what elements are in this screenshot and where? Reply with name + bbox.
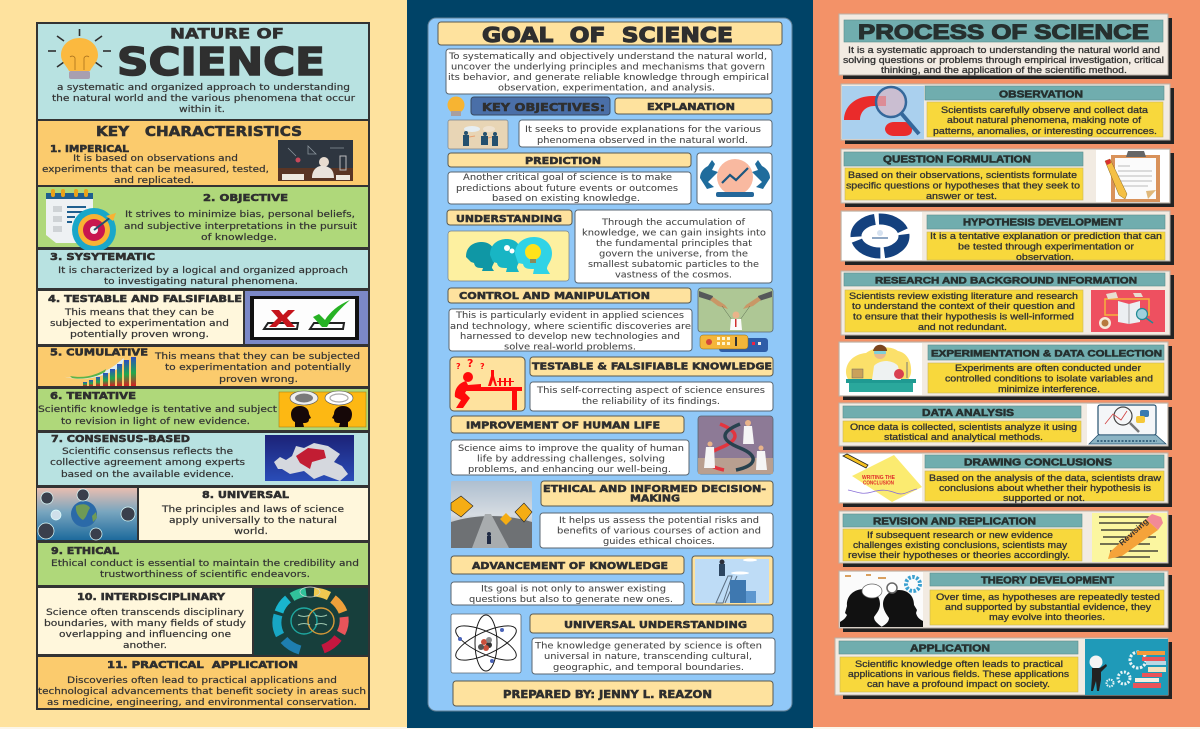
label: understanding: UNDERSTANDING <box>456 214 562 225</box>
icon: checklist and target <box>46 189 116 252</box>
text block: goal statement: uncover the underlying principles and mechanisms that govern <box>451 62 765 72</box>
text block: control and manipulation: This is particularly evident in applied sciences <box>455 311 684 321</box>
text: research: and not redundant. <box>918 322 1007 332</box>
heading: research <box>844 273 1165 286</box>
text: ethical: Ethical conduct is essential to maintain the credibility and <box>51 559 359 569</box>
text: research: Scientists review existing literature and research <box>849 291 1078 301</box>
text: experimentation: minimize interference. <box>998 384 1100 394</box>
image: scientist at chalkboard <box>278 140 353 181</box>
text: practical application: as medicine, engineering, and environmental conservation. <box>47 698 357 708</box>
text: practical application <box>38 676 366 708</box>
text: consensus <box>50 447 245 480</box>
label: prediction <box>448 153 691 167</box>
section: ethical <box>38 543 368 585</box>
text: systematic: to investigating natural phenomena. <box>104 277 298 287</box>
text block: improvement of human life <box>451 440 689 475</box>
text: consensus: collective agreement among experts <box>50 458 245 468</box>
section: cumulative <box>38 347 368 386</box>
label: key objectives <box>471 97 610 115</box>
text: practical application: Discoveries often lead to practical applications and <box>67 676 337 686</box>
section: consensus-based <box>38 433 368 485</box>
text block: goal statement <box>446 49 772 94</box>
image: open book and magnifier <box>1091 290 1165 332</box>
label: understanding <box>447 210 572 225</box>
text block: understanding: govern the universe, from the <box>599 250 748 260</box>
image: writing the conclusion <box>840 454 922 502</box>
heading: 9. ethical: 9. ETHICAL <box>51 546 120 557</box>
image: earth and network <box>37 488 137 540</box>
text: hypothesis development: be tested through experimentation or <box>958 242 1134 252</box>
card: hypothesis development <box>841 211 1174 265</box>
panel: goal of science <box>407 0 813 728</box>
text: testable: potentially proven wrong. <box>70 330 209 340</box>
text: universal: world. <box>234 527 268 537</box>
text block: testable and falsifiable knowledge <box>530 382 773 411</box>
heading: data analysis: DATA ANALYSIS <box>922 408 1014 419</box>
image: crystal ball with chart <box>697 153 772 204</box>
text: observation <box>927 102 1163 137</box>
heading: 4. testable and falsifiable: 4. TESTABLE AND FALSIFIABLE <box>48 294 242 305</box>
heading: revision and replication <box>843 514 1082 528</box>
label: explanation: EXPLANATION <box>647 102 735 113</box>
label: control and manipulation: CONTROL AND MANIPULATION <box>459 291 650 302</box>
text: observation: patterns, anomalies, or interesting occurrences. <box>933 126 1157 136</box>
text block: explanation <box>519 120 772 147</box>
text: interdisciplinary: Science often transcends disciplinary <box>46 608 244 618</box>
heading: nature of: NATURE OF <box>170 26 284 42</box>
text: revision and replication: revise their hypotheses or theories accordingly. <box>848 550 1070 560</box>
text: data analysis <box>843 421 1081 442</box>
heading: 5. cumulative: 5. CUMULATIVE <box>50 348 148 358</box>
icon: remote controls <box>700 335 768 352</box>
text: systematic <box>58 266 348 287</box>
text: tentative <box>38 405 278 427</box>
text: application <box>840 657 1078 692</box>
heading: revision and replication: REVISION AND REPLICATION <box>873 516 1036 528</box>
text: process definition: solving questions or problems through empirical investigation, critical <box>843 55 1164 65</box>
image: puzzle pieces <box>265 435 354 481</box>
text: drawing conclusions <box>925 471 1164 503</box>
text: process definition <box>843 45 1164 75</box>
text: interdisciplinary: overlapping and influencing one <box>59 630 231 640</box>
icon: confused figure at lab table: ? <box>467 357 473 370</box>
image: revising pencil: Revising <box>1117 517 1150 547</box>
text block: universal understanding <box>532 638 775 674</box>
text: universal <box>161 505 344 537</box>
text block: ethical decision-making <box>540 513 773 548</box>
icon: small bulb <box>448 96 464 116</box>
heading: key characteristics: KEY CHARACTERISTICS <box>96 124 302 140</box>
text: objective: It strives to minimize bias, personal beliefs, <box>125 210 355 220</box>
text: consensus: Scientific consensus reflects the <box>62 447 233 457</box>
text block: understanding: knowledge, we can gain insights into <box>582 228 766 238</box>
label: key objectives: KEY OBJECTIVES: <box>482 101 605 114</box>
label: prediction: PREDICTION <box>525 156 601 167</box>
section: testable and falsifiable <box>38 291 368 344</box>
text: experimentation: controlled conditions to isolate variables and <box>945 374 1153 384</box>
text: ethical <box>51 559 359 580</box>
text: data analysis: statistical and analytical methods. <box>884 432 1043 442</box>
text: testable <box>50 308 229 340</box>
text: revision and replication: If subsequent research or new evidence <box>867 530 1053 540</box>
image: heads with gears <box>840 572 923 627</box>
text block: universal understanding: universal in nature, transcending cultural, <box>544 652 752 662</box>
text: observation: about natural phenomena, making note of <box>947 115 1141 125</box>
heading: 6. tentative: 6. TENTATIVE <box>50 391 136 402</box>
section: systematic <box>38 250 368 288</box>
text: drawing conclusions: supported or not. <box>1003 493 1085 503</box>
text: hypothesis development: observation. <box>1016 252 1074 262</box>
text block: universal understanding: The knowledge generated by science is often <box>534 642 762 652</box>
text block: ethical decision-making: It helps us assess the potential risks and <box>559 516 759 526</box>
image: puppet hands <box>698 288 773 332</box>
image: road with signs <box>451 481 532 548</box>
text block: control and manipulation: and technology, where scientific discoveries are <box>450 322 691 332</box>
text: systematic: It is characterized by a logical and organized approach <box>58 266 348 276</box>
label: universal understanding: UNIVERSAL UNDERSTANDING <box>564 620 747 631</box>
heading: observation <box>925 86 1164 100</box>
text: revision and replication: challenges existing conclusions, scientists may <box>853 540 1067 550</box>
text: drawing conclusions: Based on the analysis of the data, scientists draw <box>929 473 1161 483</box>
text: cumulative: This means that they can be subjected <box>154 352 360 362</box>
text block: advancement of knowledge <box>451 582 684 605</box>
text: imperical <box>42 154 269 186</box>
text: definition <box>52 83 355 115</box>
text block: prediction <box>448 172 691 204</box>
card: revision and replication <box>839 511 1172 567</box>
heading: application: APPLICATION <box>910 644 990 654</box>
text block: control and manipulation: solve real-world problems. <box>504 342 636 352</box>
card: data analysis <box>839 403 1172 450</box>
text: observation: Scientists carefully observe and collect data <box>941 105 1149 115</box>
text block: control and manipulation: harnessed to develop new technologies and <box>460 332 680 342</box>
text: tentative: to revision in light of new evidence. <box>61 417 250 427</box>
text: question formulation: specific questions or hypotheses that they seek to <box>846 180 1080 190</box>
heading: hypothesis development <box>927 215 1165 229</box>
label: testable and falsifiable knowledge <box>530 357 773 376</box>
label: improvement of human life <box>451 416 684 433</box>
label: universal understanding <box>530 614 773 633</box>
card: application <box>835 638 1172 699</box>
image: brain ring on chalkboard <box>254 587 368 655</box>
heading: process of science: PROCESS OF SCIENCE <box>858 21 1149 44</box>
credit: prepared by <box>453 681 773 706</box>
image: person, gears and books <box>1085 639 1168 695</box>
image: heads with ideas <box>448 231 569 281</box>
text: drawing conclusions: conclusions about whether their hypothesis is <box>939 483 1151 493</box>
section: interdisciplinary <box>38 587 368 655</box>
text: question formulation <box>845 168 1083 201</box>
heading: 11. practical application: 11. PRACTICAL APPLICATION <box>107 660 298 671</box>
text: theory development: Over time, as hypotheses are repeatedly tested <box>936 592 1160 602</box>
image: laptop with python logo <box>1087 404 1167 445</box>
text block: understanding: the fundamental principles that <box>596 239 753 249</box>
heading: hypothesis development: HYPOTHESIS DEVELOPMENT <box>963 218 1123 228</box>
text block: testable and falsifiable knowledge: the reliability of its findings. <box>582 397 720 407</box>
text: cumulative: proven wrong. <box>219 375 298 385</box>
card: research and background information <box>841 271 1174 339</box>
card: title and definition <box>839 14 1172 79</box>
label: advancement of knowledge: ADVANCEMENT OF KNOWLEDGE <box>472 561 668 572</box>
icon: light bulb <box>48 29 111 79</box>
text block: control and manipulation <box>449 309 692 352</box>
section: header <box>38 24 368 119</box>
text block: ethical decision-making: guides ethical choices. <box>603 537 715 547</box>
text block: advancement of knowledge: questions but also to generate new ones. <box>469 595 673 605</box>
text: testable: This means that they can be <box>64 308 214 318</box>
heading: goal of science: GOAL OF SCIENCE <box>482 23 733 47</box>
text: universal: apply universally to the natural <box>169 516 337 526</box>
card: question formulation <box>841 149 1174 207</box>
image: DNA and scientists <box>698 416 773 474</box>
text: objective <box>124 210 358 243</box>
text block: prediction: Another critical goal of science is to make <box>463 173 672 183</box>
text: theory development: and supported by substantial evidence, they <box>945 602 1151 612</box>
text block: prediction: based on existing knowledge. <box>492 194 640 204</box>
heading: goal of science <box>438 22 782 47</box>
heading: question formulation <box>844 152 1083 166</box>
label: explanation <box>615 98 772 114</box>
text: research: to ensure that their hypothesis is well-informed <box>853 312 1074 322</box>
text: practical application: technological advancements that benefit society in areas such <box>38 687 366 697</box>
label: control and manipulation <box>448 288 691 303</box>
card: observation <box>841 84 1174 144</box>
heading: data analysis <box>843 406 1081 419</box>
text: question formulation: Based on their observations, scientists formulate <box>848 170 1077 180</box>
text: application: Scientific knowledge often leads to practical <box>855 659 1063 669</box>
label: ethical and informed decision-making: MAKING <box>630 494 680 504</box>
text: theory development: may evolve into theories. <box>989 612 1105 622</box>
image: writing the conclusion: WRITING THE <box>862 475 896 481</box>
text block: understanding: smallest subatomic particles to the <box>588 260 759 270</box>
heading: theory development: THEORY DEVELOPMENT <box>981 576 1114 586</box>
image: clipboard and pencil <box>1096 150 1169 202</box>
icon: confused figure at lab table: ? <box>480 362 485 371</box>
text block: goal statement: To systematically and objectively understand the natural world, <box>448 52 767 62</box>
text: hypothesis development <box>927 231 1165 262</box>
image: person on ladder of books <box>692 556 773 605</box>
heading: question formulation: QUESTION FORMULATION <box>883 154 1031 166</box>
text: research <box>845 290 1083 332</box>
label: ethical and informed decision-making: ETHICAL AND INFORMED DECISION- <box>543 484 766 495</box>
text: objective: of knowledge. <box>201 233 277 243</box>
text: cumulative <box>154 352 360 385</box>
text: data analysis: Once data is collected, scientists analyze it using <box>850 422 1077 432</box>
text: definition: a systematic and organized approach to understanding <box>57 83 350 93</box>
section: universal <box>37 488 368 540</box>
text: consensus: based on the available evidence. <box>61 470 234 480</box>
heading: 10. interdisciplinary: 10. INTERDISCIPLINARY <box>77 592 226 603</box>
heading: drawing conclusions: DRAWING CONCLUSIONS <box>964 458 1112 468</box>
heading: observation: OBSERVATION <box>999 90 1083 100</box>
text: application: applications in various fields. These applications <box>848 669 1069 679</box>
text block: improvement of human life: life by addressing challenges, solving <box>477 454 665 464</box>
text: definition: the natural world and the various phenomena that occur <box>52 94 355 104</box>
panel: nature of science <box>0 0 407 727</box>
text: tentative: Scientific knowledge is tentative and subject <box>38 405 278 415</box>
text block: understanding: vastness of the cosmos. <box>615 270 732 280</box>
text block: explanation: It seeks to provide explanations for the various <box>525 125 761 135</box>
heading: experimentation: EXPERIMENTATION & DATA COLLECTION <box>931 348 1162 360</box>
label: testable and falsifiable knowledge: TESTABLE & FALSIFIABLE KNOWLEDGE <box>532 362 772 372</box>
text: ethical: trustworthiness of scientific endeavors. <box>100 570 310 580</box>
heading: 1. imperical: 1. IMPERICAL <box>50 144 130 155</box>
text: interdisciplinary: boundaries, with many fields of study <box>44 619 246 629</box>
section: tentative <box>38 389 368 430</box>
heading: 7. consensus-based: 7. CONSENSUS-BASED <box>51 434 190 445</box>
section: practical application <box>38 657 368 708</box>
text block: explanation: phenomena observed in the natural world. <box>537 136 748 146</box>
heading: theory development <box>930 573 1164 586</box>
text block: improvement of human life: problems, and enhancing our well-being. <box>468 465 671 475</box>
card: theory development <box>839 571 1172 632</box>
label: improvement of human life: IMPROVEMENT OF HUMAN LIFE <box>466 420 660 432</box>
icon: rising bar chart <box>62 357 136 386</box>
image: revising pencil <box>1092 513 1167 562</box>
heading: 8. universal: 8. UNIVERSAL <box>202 490 290 501</box>
image: scientist in lab <box>840 343 922 395</box>
image: cross and check boxes <box>250 296 359 340</box>
heading: 2. objective: 2. OBJECTIVE <box>203 193 288 204</box>
text: interdisciplinary: another. <box>123 641 167 651</box>
text: interdisciplinary <box>44 608 246 651</box>
text block: goal statement: its behavior, and generate reliable knowledge through empirical <box>448 73 769 83</box>
text: process definition: It is a systematic approach to understanding the natural world and <box>848 45 1160 55</box>
heading: experimentation <box>928 345 1164 360</box>
text: theory development <box>930 590 1164 625</box>
text block: prediction: predictions about future events or outcomes <box>456 184 678 194</box>
text: testable: subjected to experimentation and <box>50 319 229 329</box>
text block: improvement of human life: Science aims to improve the quality of human <box>458 444 684 454</box>
text: experimentation <box>928 363 1164 394</box>
section: imperical <box>38 121 368 186</box>
text: question formulation: answer or test. <box>926 191 997 201</box>
credit: prepared by: PREPARED BY: JENNY L. REAZON <box>503 689 712 701</box>
panel: process of science <box>813 0 1200 727</box>
image: people discussing <box>448 120 508 149</box>
label: ethical and informed decision-making <box>541 481 773 506</box>
section: objective <box>38 187 368 252</box>
text block: understanding: Through the accumulation of <box>601 218 746 228</box>
text: universal: The principles and laws of science <box>161 505 344 515</box>
text block: understanding <box>575 210 772 283</box>
text: hypothesis development: It is a tentative explanation or prediction that can <box>930 231 1162 241</box>
image: atom <box>451 614 521 673</box>
text: application: can have a profound impact on society. <box>867 679 1050 689</box>
text: research: to understand the context of their question and <box>852 301 1075 311</box>
heading: research: RESEARCH AND BACKGROUND INFORMATION <box>875 276 1137 286</box>
card: experimentation and data collection <box>839 342 1172 400</box>
label: advancement of knowledge <box>451 556 684 574</box>
text: revision and replication <box>843 529 1082 561</box>
heading: application <box>839 641 1078 654</box>
text block: goal statement: observation, experimentation, and analysis. <box>498 84 715 94</box>
text: imperical: experiments that can be measured, tested, <box>42 165 269 175</box>
text block: ethical decision-making: benefits of various courses of action and <box>557 526 761 536</box>
image: magnifier over question mark <box>842 86 924 139</box>
image: writing the conclusion: CONCLUSION <box>863 480 894 486</box>
heading: 3. sysytematic: 3. SYSYTEMATIC <box>50 252 155 263</box>
text: cumulative: to experimentation and potentially <box>165 363 351 373</box>
text: process definition: thinking, and the application of the scientific method. <box>881 65 1127 75</box>
card: drawing conclusions <box>839 453 1172 507</box>
heading: drawing conclusions <box>925 455 1164 468</box>
image: two heads with speech bubbles <box>279 391 366 427</box>
text block: advancement of knowledge: Its goal is not only to answer existing <box>481 584 666 594</box>
text block: testable and falsifiable knowledge: This self-correcting aspect of science ensures <box>536 386 765 396</box>
icon: confused figure at lab table <box>450 357 525 411</box>
text: objective: and subjective interpretations in the pursuit <box>124 222 358 232</box>
icon: confused figure at lab table: ? <box>456 362 461 371</box>
text block: universal understanding: geographic, and temporal boundaries. <box>553 663 744 673</box>
heading: science: SCIENCE <box>117 40 325 84</box>
text: experimentation: Experiments are often conducted under <box>955 363 1141 373</box>
text: imperical: It is based on observations and <box>73 154 238 164</box>
text: definition: within it. <box>179 105 225 115</box>
image: hypothesis cycle <box>842 212 922 260</box>
text: imperical: and replicated. <box>114 176 194 186</box>
